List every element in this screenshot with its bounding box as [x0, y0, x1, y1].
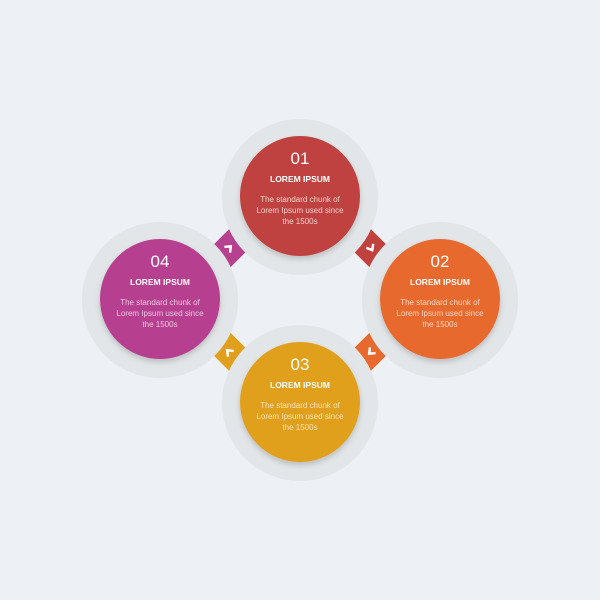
step 03 — [222, 325, 378, 481]
step 01: the 1500s — [282, 217, 318, 226]
step 03: The standard chunk of — [260, 401, 341, 410]
step 02: The standard chunk of — [400, 298, 481, 307]
step 03: 03 — [291, 355, 309, 374]
step 04: Lorem Ipsum used since — [116, 309, 204, 318]
step 01: Lorem Ipsum used since — [256, 206, 344, 215]
step 03: Lorem Ipsum used since — [256, 412, 344, 421]
step 04: LOREM IPSUM — [130, 277, 190, 287]
step 01: The standard chunk of — [260, 195, 341, 204]
step 04 — [82, 222, 238, 378]
step 01: LOREM IPSUM — [270, 174, 330, 184]
step 02: 02 — [431, 252, 449, 271]
step 04: The standard chunk of — [120, 298, 201, 307]
connector: 04 to 01 — [210, 228, 250, 268]
step 02: Lorem Ipsum used since — [396, 309, 484, 318]
step 01 — [222, 119, 378, 275]
step 02: LOREM IPSUM — [410, 277, 470, 287]
step 01: 01 — [291, 149, 309, 168]
step 03: LOREM IPSUM — [270, 380, 330, 390]
step 04: 04 — [151, 252, 169, 271]
step 02: the 1500s — [422, 320, 458, 329]
step 04: the 1500s — [142, 320, 178, 329]
connector: 02 to 03 — [350, 332, 390, 372]
connector: 01 to 02 — [350, 228, 390, 268]
connector: 03 to 04 — [210, 332, 250, 372]
step 03: the 1500s — [282, 423, 318, 432]
step 02 — [362, 222, 518, 378]
